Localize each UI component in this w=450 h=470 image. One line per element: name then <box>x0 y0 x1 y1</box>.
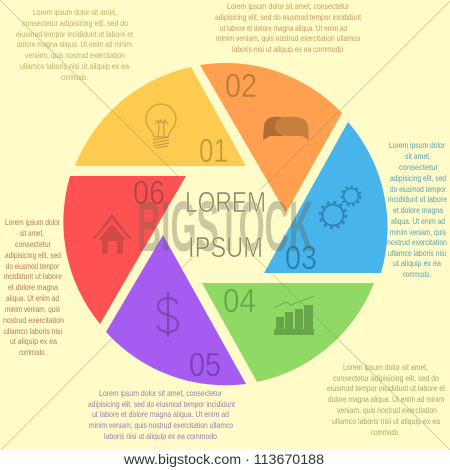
panel: segment 03 blue <box>264 122 388 276</box>
text block: left: ullamco laboris nisi <box>4 326 62 336</box>
panel: segment 01 yellow <box>75 67 246 169</box>
text block: top left: ullamco laboris nisi ut aliquip ex ea <box>20 61 129 71</box>
text block: left: consectetur <box>15 239 51 249</box>
text block: top left: commodo. <box>61 72 88 82</box>
text block: top center: Lorem ipsum dolor sit amet, consectetur <box>227 1 349 11</box>
number 01: 01 <box>199 132 228 169</box>
text block: top center: minim veniam, quis nostrud exercitation ullamco <box>216 33 360 43</box>
text block: top left: veniam, quis nostrud exercitation <box>25 50 125 60</box>
text block: bottom right: Lorem ipsum dolor sit amet, <box>343 362 428 372</box>
wedge 01 <box>75 67 246 166</box>
text block: left: nostrud exercitation <box>3 315 64 325</box>
text block: top left: dolore magna aliqua. Ut enim ad minim <box>17 39 132 49</box>
text block: right: commodo. <box>403 269 431 279</box>
text block: top center: ut labore et dolore magna aliqua. Ut enim ad <box>220 23 347 33</box>
text block: left <box>3 217 64 357</box>
wedge 06 <box>63 176 186 324</box>
number 06: 06 <box>133 174 165 211</box>
text block: top left <box>16 7 133 82</box>
icon: dollar sign <box>158 292 178 337</box>
text block: top center: adipisicing elit, sed do eiusmod tempor incididunt <box>215 12 361 22</box>
number 02: 02 <box>225 67 257 104</box>
number 05: 05 <box>189 346 221 383</box>
panel: segment 06 red <box>63 174 186 324</box>
panel: segment 02 orange <box>200 63 342 213</box>
text block: left: Lorem ipsum dolor <box>5 217 60 227</box>
text block: left: minim veniam, quis <box>5 304 60 314</box>
center title <box>185 187 266 264</box>
text block: bottom right: commodo. <box>371 427 400 437</box>
title line IPSUM: IPSUM <box>188 232 263 264</box>
icon: gears <box>320 186 360 228</box>
text block: bottom center: laboris nisi ut aliquip ex ea commodo <box>104 431 217 441</box>
panel: segment 04 green <box>202 282 374 382</box>
icon: speech bubbles <box>263 117 309 140</box>
text block: top left: eiusmod tempor incididunt ut labore et <box>16 29 133 39</box>
icon: light bulb <box>146 104 176 148</box>
text block: top left: consectetur adipisicing elit, sed do <box>22 18 128 28</box>
footer credit: www.bigstock.com · 113670188 <box>123 452 324 467</box>
number 03: 03 <box>285 239 317 276</box>
text block: left: adipisicing elit, sed <box>5 250 61 260</box>
text block: bottom center: ut labore et dolore magna aliqua. Ut enim ad <box>92 409 229 419</box>
text block: bottom center: adipisicing elit, sed do eiusmod tempor incididunt <box>88 399 235 409</box>
text block: right: consectetur <box>399 162 438 172</box>
text block: left: do eiusmod tempor <box>6 261 59 271</box>
text block: top center <box>215 1 361 54</box>
icon: house <box>92 214 132 254</box>
text block: bottom right <box>327 362 445 437</box>
text block: top left: Lorem ipsum dolor sit amet, <box>33 7 117 17</box>
text block: left: commodo. <box>19 347 46 357</box>
wedge 04 <box>202 283 374 382</box>
text block: bottom center: minim veniam, quis nostrud exercitation ullamco <box>89 420 233 430</box>
text block: top center: laboris nisi ut aliquip ex ea commodo <box>232 44 343 54</box>
text block: left: incididunt ut labore <box>4 271 62 281</box>
text block: left: et dolore magna <box>8 282 58 292</box>
text block: left: ut aliquip ex ea <box>10 336 57 346</box>
text block: right: sit amet, <box>405 151 431 161</box>
text block: left: sit amet, <box>20 228 44 238</box>
text block: bottom center: Lorem ipsum dolor sit amet, consectetur <box>99 388 222 398</box>
wedge 03 <box>264 122 388 273</box>
wedge 05 <box>106 235 246 385</box>
text block: right <box>387 140 447 279</box>
text block: left: aliqua. Ut enim ad <box>6 293 59 303</box>
text block: right: ut aliquip ex ea <box>393 258 441 268</box>
icon: bar chart <box>274 296 314 335</box>
title line LOREM: LOREM <box>185 187 266 219</box>
text block: bottom center <box>88 388 235 441</box>
wedge 02 <box>200 63 342 213</box>
panel: segment 05 purple <box>106 235 246 385</box>
number 04: 04 <box>223 282 256 319</box>
